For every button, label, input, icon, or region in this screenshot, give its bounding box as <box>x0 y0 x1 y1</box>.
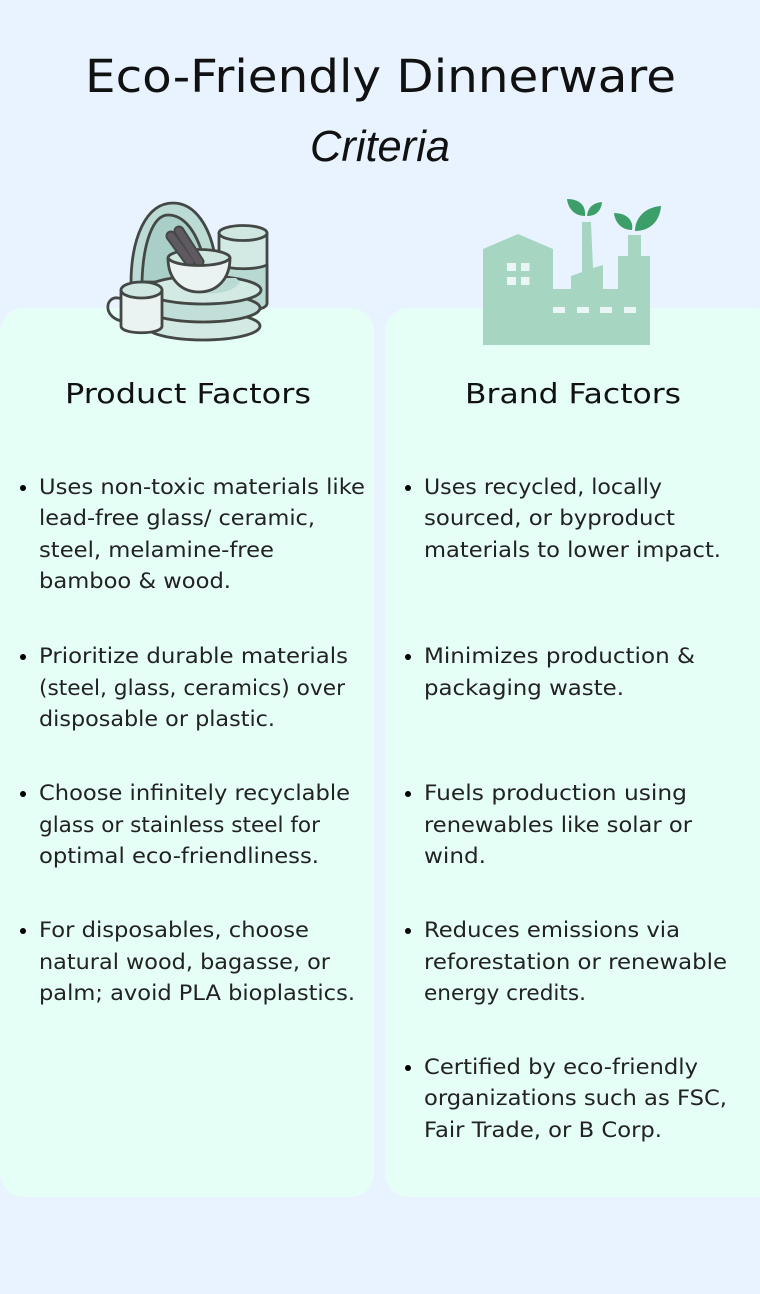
bullet: recyclable: Choose infinitely recyclable <box>39 781 350 806</box>
bullet: certifications: Fair Trade, or B Corp. <box>424 1118 662 1143</box>
bullet: renewables: renewables like solar or <box>424 813 692 838</box>
bullet: emissions <box>405 918 727 1006</box>
bullet: recyclable: glass or stainless steel for <box>39 813 320 838</box>
bullet: non-toxic materials: Uses non-toxic materials like <box>39 475 365 500</box>
bullet: waste: packaging waste. <box>424 676 624 701</box>
product factors list <box>20 475 365 1006</box>
bullet: recycled materials <box>405 475 721 563</box>
bullet: recycled materials: sourced, or byproduct <box>424 506 675 531</box>
bullet: certifications: Certified by eco-friendly <box>424 1055 698 1080</box>
bullet: renewables: Fuels production using <box>424 781 687 806</box>
title: Eco-Friendly Dinnerware <box>85 50 676 103</box>
bullet: disposables: For disposables, choose <box>39 918 309 943</box>
bullet: waste: Minimizes production & <box>424 644 695 669</box>
bullet: emissions: Reduces emissions via <box>424 918 680 943</box>
bullet: certifications: organizations such as FSC, <box>424 1086 727 1111</box>
heading: product factors: Product Factors <box>65 377 311 410</box>
bullet: durable materials: Prioritize durable materials <box>39 644 348 669</box>
bullet: renewables: wind. <box>424 844 486 869</box>
bullet: recyclable <box>20 781 350 869</box>
heading: brand factors: Brand Factors <box>465 377 681 410</box>
panel: product factors <box>0 308 374 1197</box>
bullet: recycled materials: Uses recycled, locally <box>424 475 662 500</box>
bullet: certifications <box>405 1055 727 1143</box>
bullet: non-toxic materials: lead-free glass/ ceramic, <box>39 506 315 531</box>
bullet: emissions: energy credits. <box>424 981 586 1006</box>
bullet: emissions: reforestation or renewable <box>424 950 727 975</box>
bullet: recyclable: optimal eco-friendliness. <box>39 844 319 869</box>
bullet: disposables: palm; avoid PLA bioplastics. <box>39 981 355 1006</box>
bullet: renewables <box>405 781 692 869</box>
bullet: non-toxic materials: steel, melamine-free <box>39 538 274 563</box>
bullet: durable materials <box>20 644 348 732</box>
subtitle: Criteria <box>310 122 450 171</box>
bullet: disposables: natural wood, bagasse, or <box>39 950 330 975</box>
icon: green factory with leaves <box>483 199 661 345</box>
bullet: disposables <box>20 918 355 1006</box>
bullet: non-toxic materials <box>20 475 365 594</box>
brand factors list <box>405 475 727 1143</box>
bullet: recycled materials: materials to lower impact. <box>424 538 721 563</box>
bullet: durable materials: disposable or plastic. <box>39 707 275 732</box>
icon: stacked dinnerware <box>108 203 267 340</box>
panel: brand factors <box>385 308 760 1197</box>
bullet: durable materials: (steel, glass, ceramics) over <box>39 676 345 701</box>
bullet: non-toxic materials: bamboo & wood. <box>39 569 231 594</box>
bullet: waste <box>405 644 695 701</box>
